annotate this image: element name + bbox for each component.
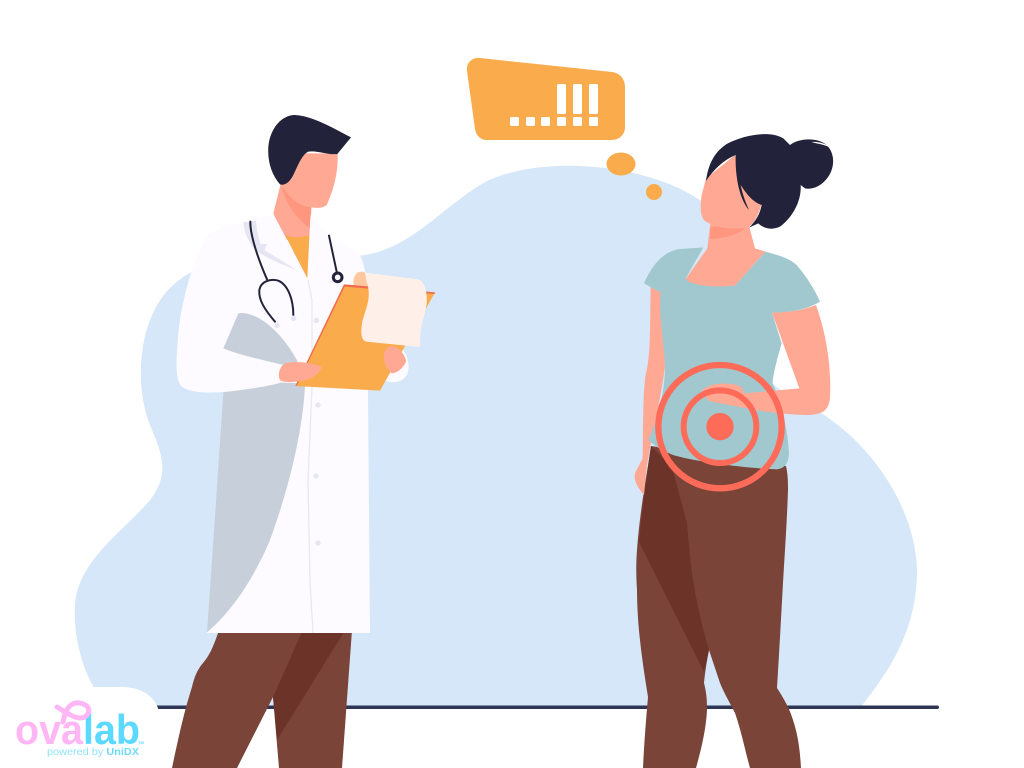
speech bubble <box>467 58 625 140</box>
right hand <box>384 346 406 373</box>
thought bubble small dot <box>646 184 662 200</box>
paper sheet <box>361 273 427 347</box>
pain target rings <box>658 365 782 488</box>
logo wordmark: ovalab <box>15 706 140 753</box>
coat seam <box>308 280 313 633</box>
coat right cuff <box>383 350 409 382</box>
logo tagline: powered by UniDX <box>47 746 139 758</box>
yellow shirt <box>285 235 310 278</box>
patient left arm <box>635 287 665 495</box>
logo trademark: TM <box>138 740 144 745</box>
clipboard <box>295 284 435 391</box>
coat buttons <box>314 318 319 323</box>
ground line <box>150 706 939 709</box>
left hand <box>279 362 322 382</box>
logo ribbon loop <box>57 703 89 722</box>
logo backing panel <box>0 687 160 768</box>
patient hair bun and fringe <box>706 134 833 229</box>
coat shadow <box>207 383 305 632</box>
stethoscope <box>250 222 342 322</box>
thought bubble large dot <box>606 152 636 176</box>
teal T-shirt <box>644 247 820 469</box>
bubble marks: ellipsis and exclamation points <box>510 84 598 126</box>
far hand behind clipboard <box>353 272 369 292</box>
patient trousers <box>636 446 801 768</box>
doctor <box>172 115 435 768</box>
bun highlight <box>812 142 831 148</box>
head <box>282 153 338 208</box>
coat lapel shadow <box>243 221 297 270</box>
ovalab logo <box>15 703 144 758</box>
lab coat <box>177 214 370 633</box>
neck <box>273 180 312 240</box>
patient <box>635 134 833 768</box>
background blob <box>75 166 917 708</box>
doctor hair <box>268 115 351 185</box>
patient head <box>701 155 762 229</box>
coat pocket shadow <box>223 313 298 365</box>
patient neck <box>685 220 765 287</box>
patient right arm <box>702 305 830 415</box>
doctor upper body <box>177 115 435 633</box>
doctor trousers <box>172 630 352 768</box>
